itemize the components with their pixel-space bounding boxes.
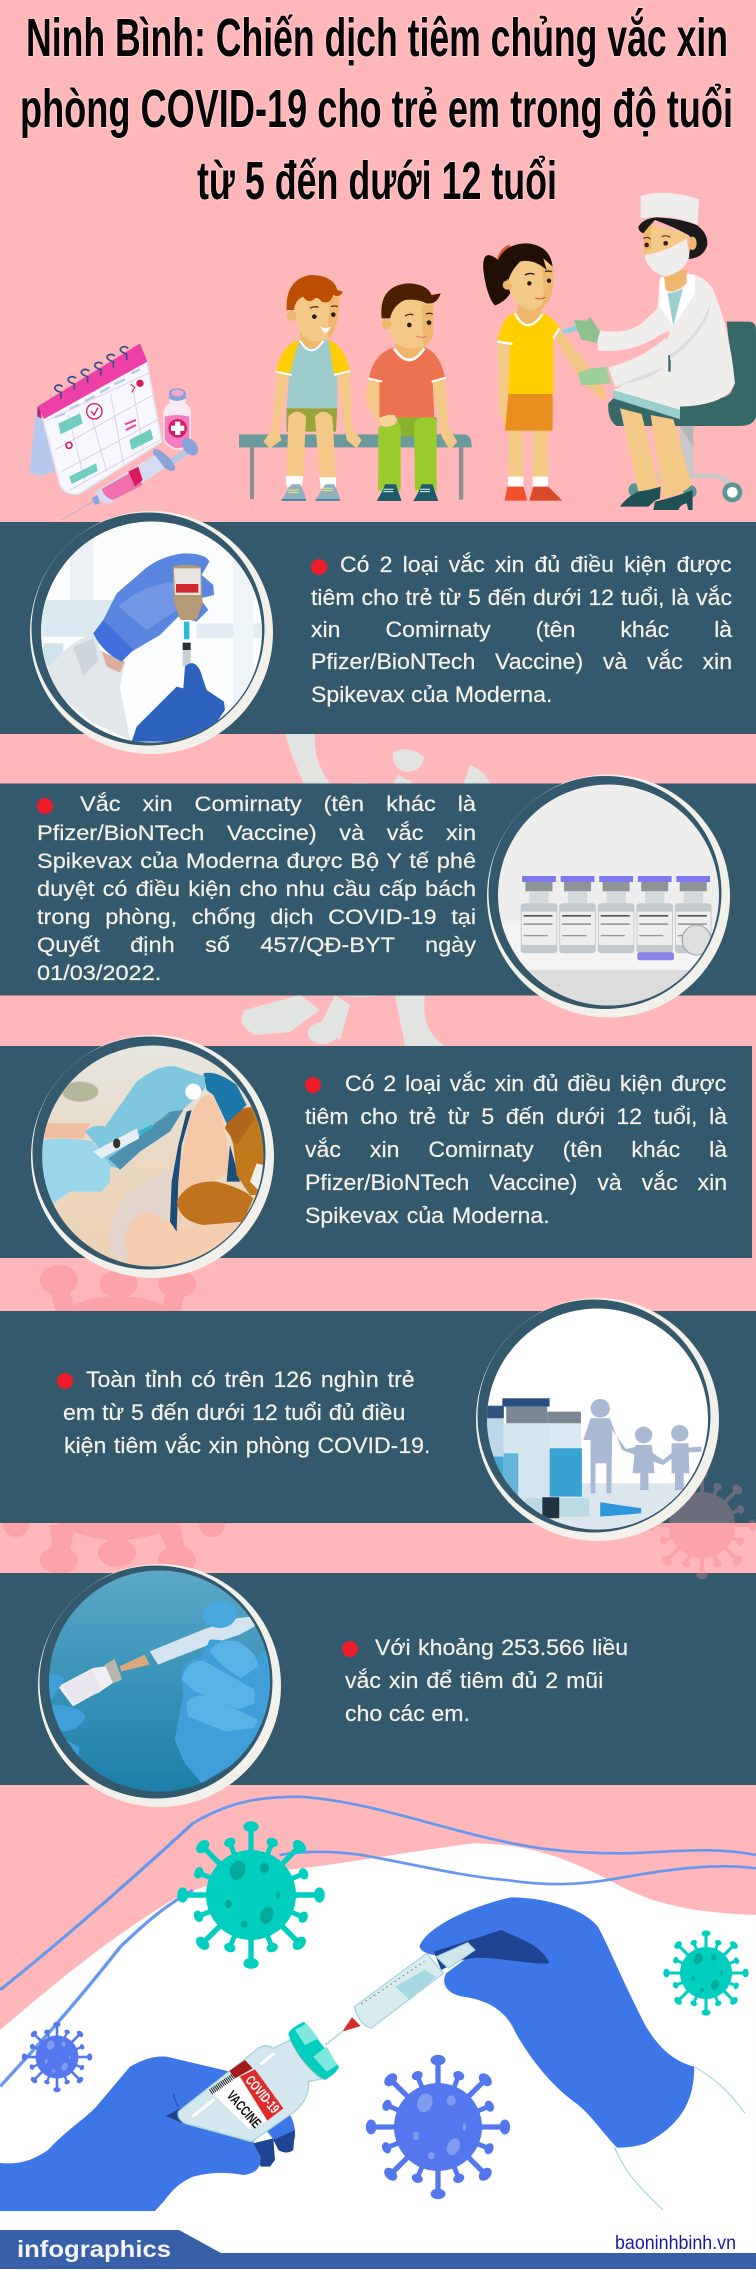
source credit: baoninhbinh.vn [615, 2233, 736, 2254]
bullet 3 [305, 1077, 321, 1093]
photo circle 3: child vaccinated holding teddy bear [31, 1035, 274, 1278]
photo circle 1: gloved hands with vial [30, 511, 273, 754]
title [20, 8, 733, 211]
panel 4 background [0, 1311, 756, 1523]
vial label COVID-19: COVID-19 [242, 2072, 283, 2116]
panel 2 background [0, 784, 756, 996]
boy with teal shirt [263, 275, 362, 500]
background virus: grey [242, 733, 491, 1046]
background virus: pink right, overlay on panel [648, 1471, 756, 1579]
bullet 4 [57, 1373, 73, 1389]
illustration: left hand with vaccine vial [0, 2022, 339, 2211]
text: panel 4: Toàn tỉnh có trên 126 nghìn trẻ [86, 1367, 415, 1392]
text: panel 5: Với khoảng 253.566 liều [375, 1635, 628, 1660]
footer label infographics: infographics [17, 2236, 171, 2262]
virus: blue large [366, 2055, 510, 2199]
text: panel 2: 01/03/2022. [37, 962, 161, 985]
text: panel 1: Pfizer/BioNTech Vaccine) và vắc xin [311, 649, 732, 674]
text: panel 1: Spikevax của Moderna. [311, 682, 552, 707]
background virus: pink left [0, 1265, 240, 1574]
bench [239, 434, 472, 500]
text: panel 3: Pfizer/BioNTech Vaccine) và vắc xin [305, 1170, 727, 1195]
vial label VACCINE: VACCINE [224, 2087, 265, 2131]
text: panel 2: trong phòng, chống dịch COVID-19 tại [37, 906, 476, 929]
illustration: boys on a bench [239, 275, 472, 501]
panel 3 background [0, 1046, 752, 1258]
icon: medicine bottle [163, 388, 191, 450]
text: panel 2: Pfizer/BioNTech Vaccine) và vắc xin [37, 822, 476, 845]
text: panel 2: Vắc xin Comirnaty (tên khác là [80, 793, 476, 816]
nurse on chair [562, 193, 756, 510]
text: panel 5: cho các em. [345, 1701, 470, 1726]
footer bar [0, 2230, 756, 2269]
girl with yellow shirt [483, 243, 606, 501]
text: panel 3: Có 2 loại vắc xin đủ điều kiện được [345, 1071, 726, 1096]
virus: teal large [177, 1821, 325, 1969]
text: panel 4: em từ 5 đến dưới 12 tuổi đủ điều [63, 1400, 405, 1425]
panel 5 background [0, 1573, 756, 1785]
text: panel 3: vắc xin Comirnaty (tên khác là [305, 1137, 727, 1162]
text: panel 2: Quyết định số 457/QĐ-BYT ngày [37, 934, 476, 957]
photo circle 4: vials and paper family [476, 1298, 719, 1541]
text: panel 5: vắc xin để tiêm đủ 2 mũi [345, 1668, 603, 1693]
photo circle 2: row of vaccine vials [487, 774, 730, 1018]
panel 1 background [0, 522, 756, 734]
boy with orange shirt [366, 283, 457, 501]
text: panel 3: tiêm cho trẻ từ 5 đến dưới 12 tuổi, là [305, 1104, 727, 1129]
text: panel 4: kiện tiêm vắc xin phòng COVID-19. [64, 1433, 430, 1458]
text: panel 1: Có 2 loại vắc xin đủ điều kiện được [340, 552, 732, 577]
text: panel 2: Spikevax của Moderna được Bộ Y tế phê [37, 850, 476, 873]
text: panel 3: Spikevax của Moderna. [305, 1203, 550, 1228]
illustration: girl and nurse [483, 193, 756, 510]
text: panel 1: xin Comirnaty (tên khác là [311, 617, 732, 642]
virus: teal small [663, 1930, 749, 2016]
photo circle 5: syringe and vial in blue gloves [38, 1564, 281, 1807]
title: từ 5 đến dưới 12 tuổi [197, 151, 557, 211]
icon: calendar [29, 343, 162, 494]
background virus: pink right, lower part [648, 1471, 756, 1579]
illustration: bottom scene background [0, 1797, 756, 2277]
bullet 1 [311, 559, 327, 575]
icon: small syringe [62, 435, 202, 520]
illustration: calendar, bottle and syringe [29, 343, 202, 520]
text: panel 1: tiêm cho trẻ từ 5 đến dưới 12 tuổi, là vắc [311, 585, 732, 610]
text: panel 2: duyệt có điều kiện cho nhu cầu cấp bách [37, 878, 476, 901]
bullet 5 [342, 1641, 358, 1657]
bullet 2 [37, 798, 53, 814]
illustration: right hand with syringe [325, 1897, 745, 2210]
virus: blue small [22, 2022, 92, 2092]
